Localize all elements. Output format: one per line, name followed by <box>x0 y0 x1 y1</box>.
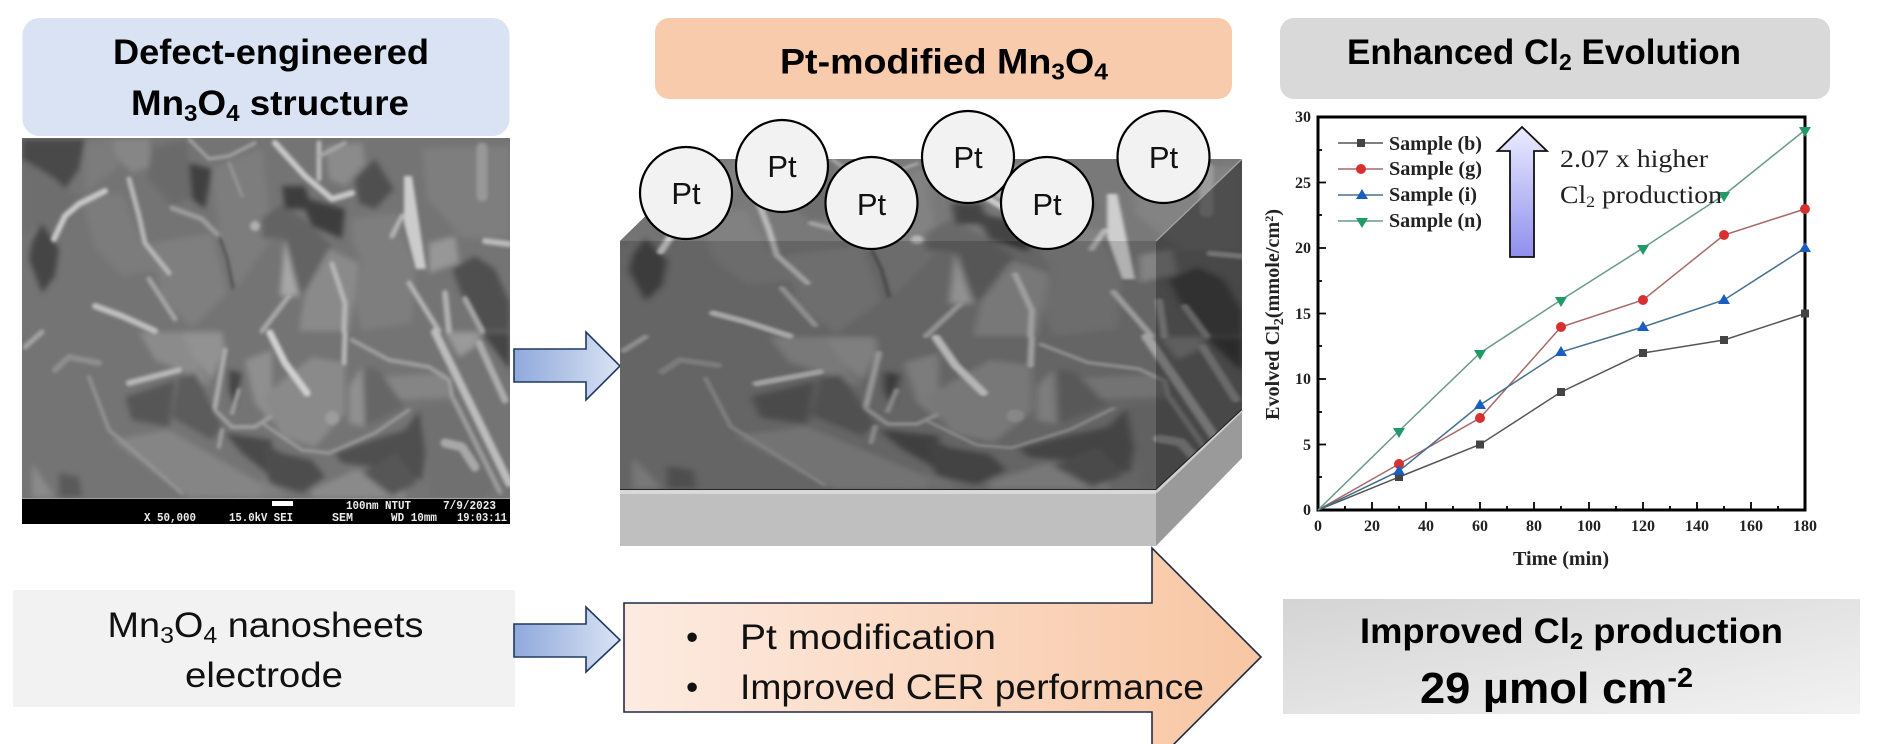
label: Mn3O4 nanosheets electrode: 3 <box>160 622 174 648</box>
heading: Enhanced Cl2 Evolution <box>1280 18 1830 99</box>
y axis tick labels: 0 <box>1303 502 1311 519</box>
label: Mn3O4 nanosheets electrode: Mn <box>108 606 156 645</box>
y axis title: 2 <box>1262 216 1276 222</box>
Pt particle 5 <box>1001 157 1093 249</box>
annotation: 2.07 x higher Cl2 production: production <box>1595 182 1723 209</box>
Pt particle 6 <box>1118 111 1210 203</box>
result box: improved Cl2 production: 2 <box>1570 628 1583 654</box>
series: Sample (i) <box>1318 242 1811 510</box>
Pt particle 1: Pt <box>671 176 701 211</box>
y axis tick labels: 30 <box>1295 109 1311 126</box>
Pt particle 3 <box>826 157 918 249</box>
arrow: SEM to Pt-modified <box>514 332 620 400</box>
heading: defect-engineered structure: Defect-engineered <box>113 33 429 72</box>
line chart: evolved Cl2 vs time <box>1262 109 1817 570</box>
legend: Sample (b): Sample (b) <box>1389 133 1482 155</box>
Pt particle 2 <box>736 120 828 212</box>
Pt particle 1 <box>640 147 732 239</box>
SEM texture faces <box>614 154 1249 495</box>
legend: Sample (i): Sample (i) <box>1389 184 1477 206</box>
SEM micrograph with scale bar: SEM <box>332 511 353 525</box>
heading: defect-engineered structure: Mn <box>131 84 182 123</box>
y axis title: (mmole/cm <box>1262 221 1284 318</box>
Pt particle 2: Pt <box>767 149 797 184</box>
y axis title: Evolved Cl <box>1262 326 1284 420</box>
SEM micrograph with scale bar: WD 10mm <box>391 511 437 525</box>
Pt particle 5: Pt <box>1032 187 1062 222</box>
SEM micrograph with scale bar: X 50,000 <box>144 511 196 525</box>
SEM micrograph with scale bar: 7/9/2023 <box>443 499 496 513</box>
heading: Enhanced Cl2 Evolution: Enhanced Cl <box>1347 33 1559 72</box>
legend: Sample (g): Sample (g) <box>1389 158 1482 180</box>
Pt nanoparticles <box>640 111 1210 249</box>
label: Mn3O4 nanosheets electrode: electrode <box>185 656 343 695</box>
big process arrow with bullet list: • <box>686 618 698 657</box>
label: Mn3O4 nanosheets electrode: 4 <box>203 622 217 648</box>
heading: Pt-modified Mn3O4: 4 <box>1094 58 1108 84</box>
result box: improved Cl2 production: production <box>1583 612 1783 651</box>
y axis tick labels <box>1295 109 1311 519</box>
label: Mn3O4 nanosheets electrode <box>13 590 515 707</box>
annotation: 2.07 x higher Cl2 production: 2.07 x higher <box>1560 146 1709 173</box>
heading: Enhanced Cl2 Evolution: Evolution <box>1572 33 1741 72</box>
label: Mn3O4 nanosheets electrode: nanosheets <box>217 606 424 645</box>
annotation: 2.07 x higher Cl2 production: Cl <box>1560 182 1584 209</box>
y axis title: 2 <box>1272 318 1287 325</box>
x axis tick labels: 40 <box>1418 518 1434 535</box>
x axis tick labels: 60 <box>1472 518 1488 535</box>
plot frame and ticks <box>1318 117 1805 510</box>
heading: defect-engineered structure: 3 <box>184 100 197 126</box>
x axis tick labels: 100 <box>1577 518 1601 535</box>
x axis tick labels: 20 <box>1364 518 1380 535</box>
y axis tick labels: 20 <box>1295 240 1311 257</box>
y axis title: ) <box>1262 209 1284 216</box>
x axis tick labels: 80 <box>1526 518 1542 535</box>
Pt particle 3: Pt <box>857 187 887 222</box>
x axis tick labels: 140 <box>1685 518 1709 535</box>
panel: defect-engineered Mn3O4 <box>17 18 515 525</box>
legend <box>1338 133 1482 232</box>
series: Sample (n) <box>1318 127 1811 510</box>
x axis tick labels: 0 <box>1314 518 1322 535</box>
data series <box>1318 127 1811 510</box>
heading: defect-engineered structure: 4 <box>226 100 240 126</box>
heading: Pt-modified Mn3O4: O <box>1065 42 1094 82</box>
SEM micrograph with scale bar: 15.0kV SEI <box>229 511 293 525</box>
Pt particle 6: Pt <box>1149 140 1179 175</box>
SEM micrograph with scale bar: 19:03:11 <box>457 511 507 525</box>
y axis tick labels: 5 <box>1303 437 1311 454</box>
result box: improved Cl2 production <box>1283 599 1860 714</box>
big process arrow with bullet list <box>624 548 1261 744</box>
heading: Pt-modified Mn3O4: 3 <box>1051 58 1065 84</box>
result box: improved Cl2 production: 29 µmol cm <box>1420 664 1661 713</box>
annotation: 2.07 x higher Cl2 production: 2 <box>1586 194 1595 211</box>
result box: improved Cl2 production: Improved Cl <box>1360 612 1562 651</box>
y axis tick labels: 25 <box>1295 175 1311 192</box>
result box: improved Cl2 production: -2 <box>1667 662 1693 693</box>
x axis title: Time (min) <box>1513 548 1609 570</box>
heading: Enhanced Cl2 Evolution: 2 <box>1559 49 1572 75</box>
annotation: 2.07 x higher Cl2 production <box>1560 146 1723 211</box>
heading: defect-engineered structure: O <box>197 84 226 123</box>
x axis tick labels: 180 <box>1793 518 1817 535</box>
SEM micrograph with scale bar <box>17 133 515 525</box>
x axis tick labels: 120 <box>1631 518 1655 535</box>
x axis tick labels: 160 <box>1739 518 1763 535</box>
heading: Pt-modified Mn3O4 <box>655 18 1232 99</box>
label: Mn3O4 nanosheets electrode: O <box>174 606 203 645</box>
Pt particle 4 <box>922 111 1014 203</box>
y axis tick labels: 10 <box>1295 371 1311 388</box>
3D electrode block with SEM texture <box>614 154 1249 546</box>
legend: Sample (n): Sample (n) <box>1389 210 1482 232</box>
heading: defect-engineered structure: structure <box>240 84 409 123</box>
heading: Pt-modified Mn3O4: Pt-modified Mn <box>780 42 1033 82</box>
series: Sample (b) <box>1318 310 1809 510</box>
legend: Sample (n) <box>1338 210 1482 232</box>
legend: Sample (i) <box>1338 184 1477 206</box>
Pt particle 4: Pt <box>953 140 983 175</box>
series: Sample (g) <box>1318 204 1810 510</box>
legend: Sample (b) <box>1338 133 1482 155</box>
arrow: upward increase <box>1498 127 1547 257</box>
big process arrow with bullet list: Pt modification <box>740 618 996 657</box>
big process arrow with bullet list: Improved CER performance <box>740 668 1204 707</box>
arrow: electrode to Pt modification <box>514 607 620 672</box>
electrode slab base <box>620 410 1242 546</box>
x axis tick labels <box>1314 518 1817 535</box>
SEM micrograph with scale bar: 100nm NTUT <box>346 499 411 513</box>
heading: defect-engineered structure <box>22 18 510 136</box>
big process arrow with bullet list: • <box>686 668 698 707</box>
legend: Sample (g) <box>1338 158 1482 180</box>
y axis tick labels: 15 <box>1295 306 1311 323</box>
